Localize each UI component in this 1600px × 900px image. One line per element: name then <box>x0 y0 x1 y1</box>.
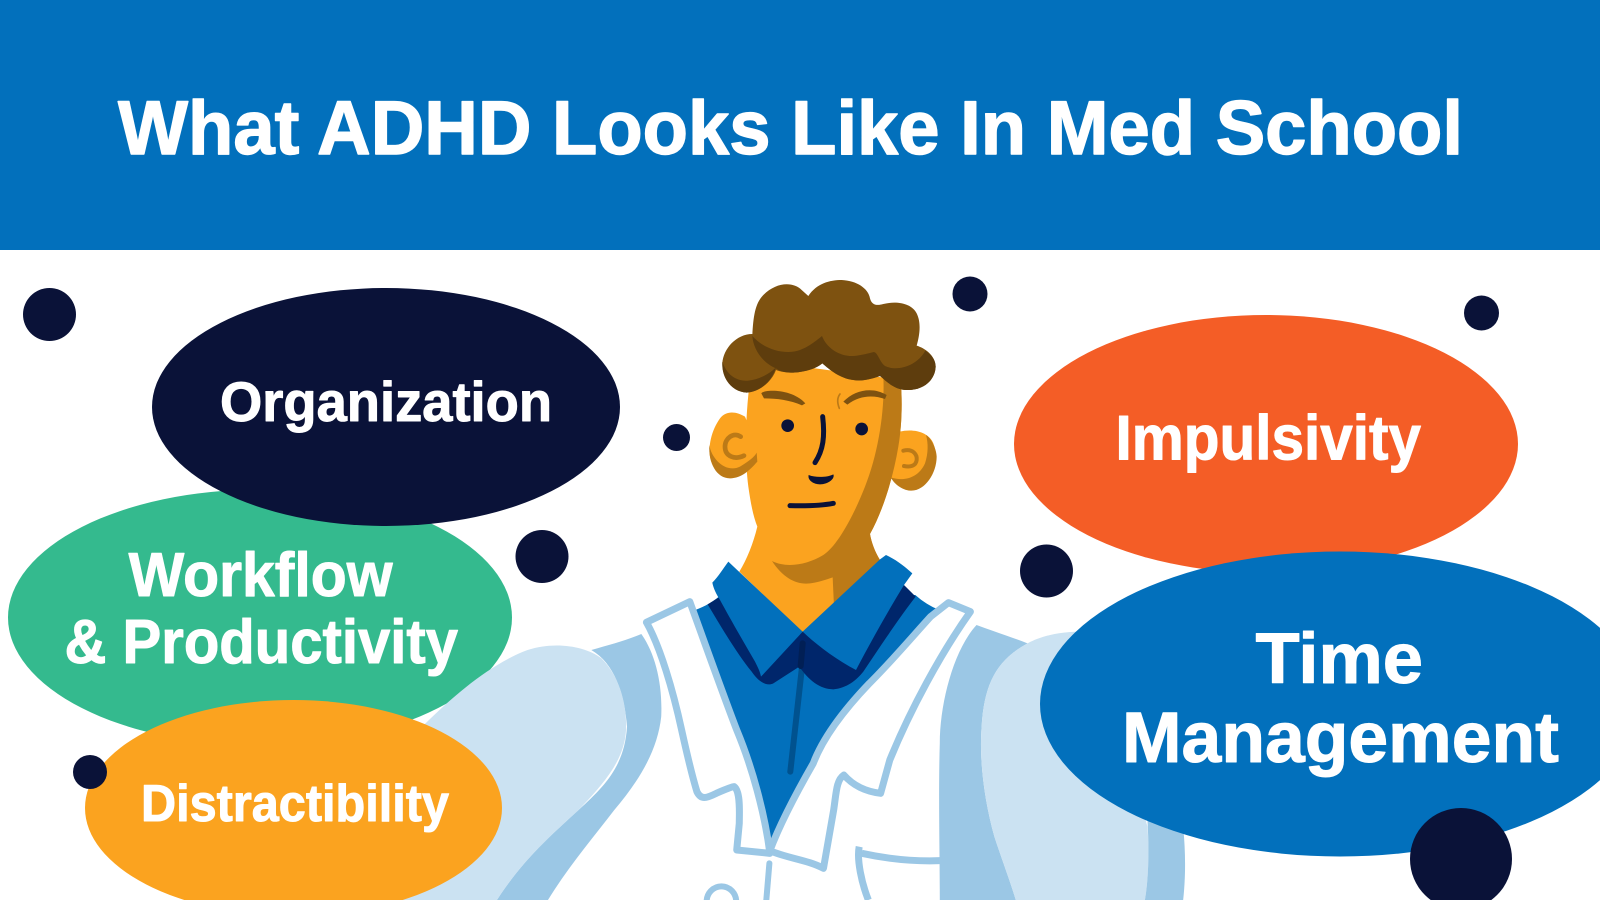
bubble: time management: Management <box>1122 699 1559 778</box>
decorative dots <box>23 276 1512 900</box>
face and neck <box>739 360 902 633</box>
bubble: impulsivity: Impulsivity <box>1116 404 1421 474</box>
brow crease <box>838 394 840 408</box>
face shadow <box>772 377 902 607</box>
bubble: workflow and productivity: Workflow <box>129 541 393 610</box>
collar right flap <box>803 555 912 670</box>
right ear <box>891 430 936 490</box>
right lapel <box>770 603 970 868</box>
title: What ADHD Looks Like In Med School <box>118 86 1463 171</box>
bubble: organization: Organization <box>220 370 552 433</box>
right sleeve shadow <box>939 625 1028 900</box>
left ear shadow <box>709 445 757 478</box>
hair shadow <box>722 336 936 393</box>
shirt <box>691 595 940 847</box>
illustration: doctor head <box>709 280 937 633</box>
right ear inner <box>903 450 917 466</box>
collar left flap <box>712 562 803 677</box>
bubble: time management: Time <box>1256 620 1423 699</box>
mouth <box>790 503 833 506</box>
bubble: workflow and productivity <box>8 490 512 746</box>
hair <box>722 280 936 393</box>
far right sleeve edge <box>1145 820 1185 900</box>
coat button <box>707 886 736 900</box>
illustration: shirt collar <box>708 555 916 689</box>
bubble: impulsivity <box>1014 315 1518 573</box>
left sleeve shadow <box>497 634 661 900</box>
left ear <box>710 412 757 478</box>
bubble: distractibility <box>85 700 502 900</box>
nose <box>815 417 824 463</box>
left arm <box>400 645 626 900</box>
bubble: workflow and productivity: & Productivity <box>64 608 458 677</box>
illustration: doctor body in white coat <box>400 595 1185 900</box>
bubble: time management <box>1040 552 1600 856</box>
left ear inner <box>725 435 744 458</box>
eyebrows <box>761 390 887 405</box>
nostrils <box>808 474 834 484</box>
left lapel <box>646 602 770 853</box>
collar underside <box>708 585 916 689</box>
coat centre seam <box>766 863 769 900</box>
shirt placket <box>790 667 802 772</box>
right ear shadow <box>891 435 937 491</box>
eyes <box>781 419 868 435</box>
bubble: organization <box>152 288 620 526</box>
header banner <box>0 0 1600 250</box>
right arm <box>981 632 1148 900</box>
collar placket <box>801 643 803 666</box>
coat pocket <box>859 847 940 900</box>
bubble: distractibility: Distractibility <box>141 775 449 833</box>
